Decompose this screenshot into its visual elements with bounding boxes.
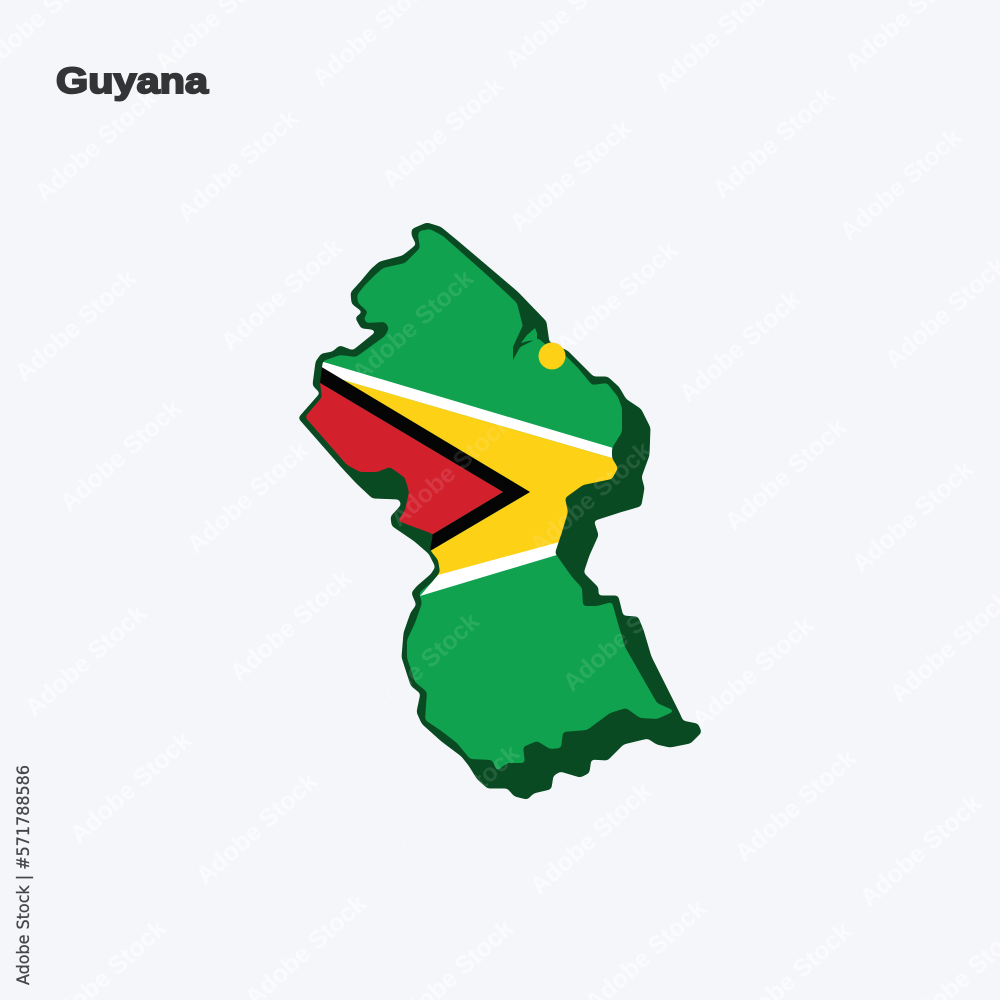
text: Adobe Stock [172,104,304,227]
text: Adobe Stock [551,236,683,359]
text: Adobe Stock [835,123,967,246]
flag fields masked to country [306,229,672,770]
estuary island [521,328,537,343]
text: Adobe Stock [525,777,657,900]
text: Adobe Stock [377,71,509,194]
text: Adobe Stock [674,285,806,408]
text: Adobe Stock [65,726,197,849]
text: Adobe Stock [720,413,852,536]
map: Guyana flag-filled country [290,215,700,798]
text: Adobe Stock [216,233,348,356]
text: Adobe Stock [385,409,517,532]
text: Adobe Stock [353,607,485,730]
text: Adobe Stock [847,455,979,578]
text: Adobe Stock [525,436,657,559]
black triangle [320,367,530,550]
text: Adobe Stock [191,767,323,890]
text: Adobe Stock [55,394,187,517]
capital marker dot [538,342,566,370]
text: Adobe Stock [182,436,314,559]
upper white stripe [322,362,612,458]
text: Adobe Stock [687,611,819,734]
text: Adobe Stock [558,574,690,697]
text: Adobe Stock [30,84,162,207]
text: Adobe Stock [225,564,357,687]
text: Adobe Stock [708,81,840,204]
shadow and outline silhouette [300,224,700,798]
text: Adobe Stock [855,789,987,912]
estuary [513,300,548,360]
text: Adobe Stock [347,264,479,387]
green field [320,229,672,770]
stock credit: Adobe Stock | #571788586 [14,765,33,985]
text: Adobe Stock [730,744,862,867]
yellow arrowhead [343,380,640,575]
text: Adobe Stock [505,114,637,237]
text: Adobe Stock [20,599,152,722]
text: Adobe Stock [393,739,525,862]
title: Guyana [56,60,209,101]
text: Adobe Stock [10,264,142,387]
red triangle [306,383,503,534]
lower white stripe [420,542,559,596]
